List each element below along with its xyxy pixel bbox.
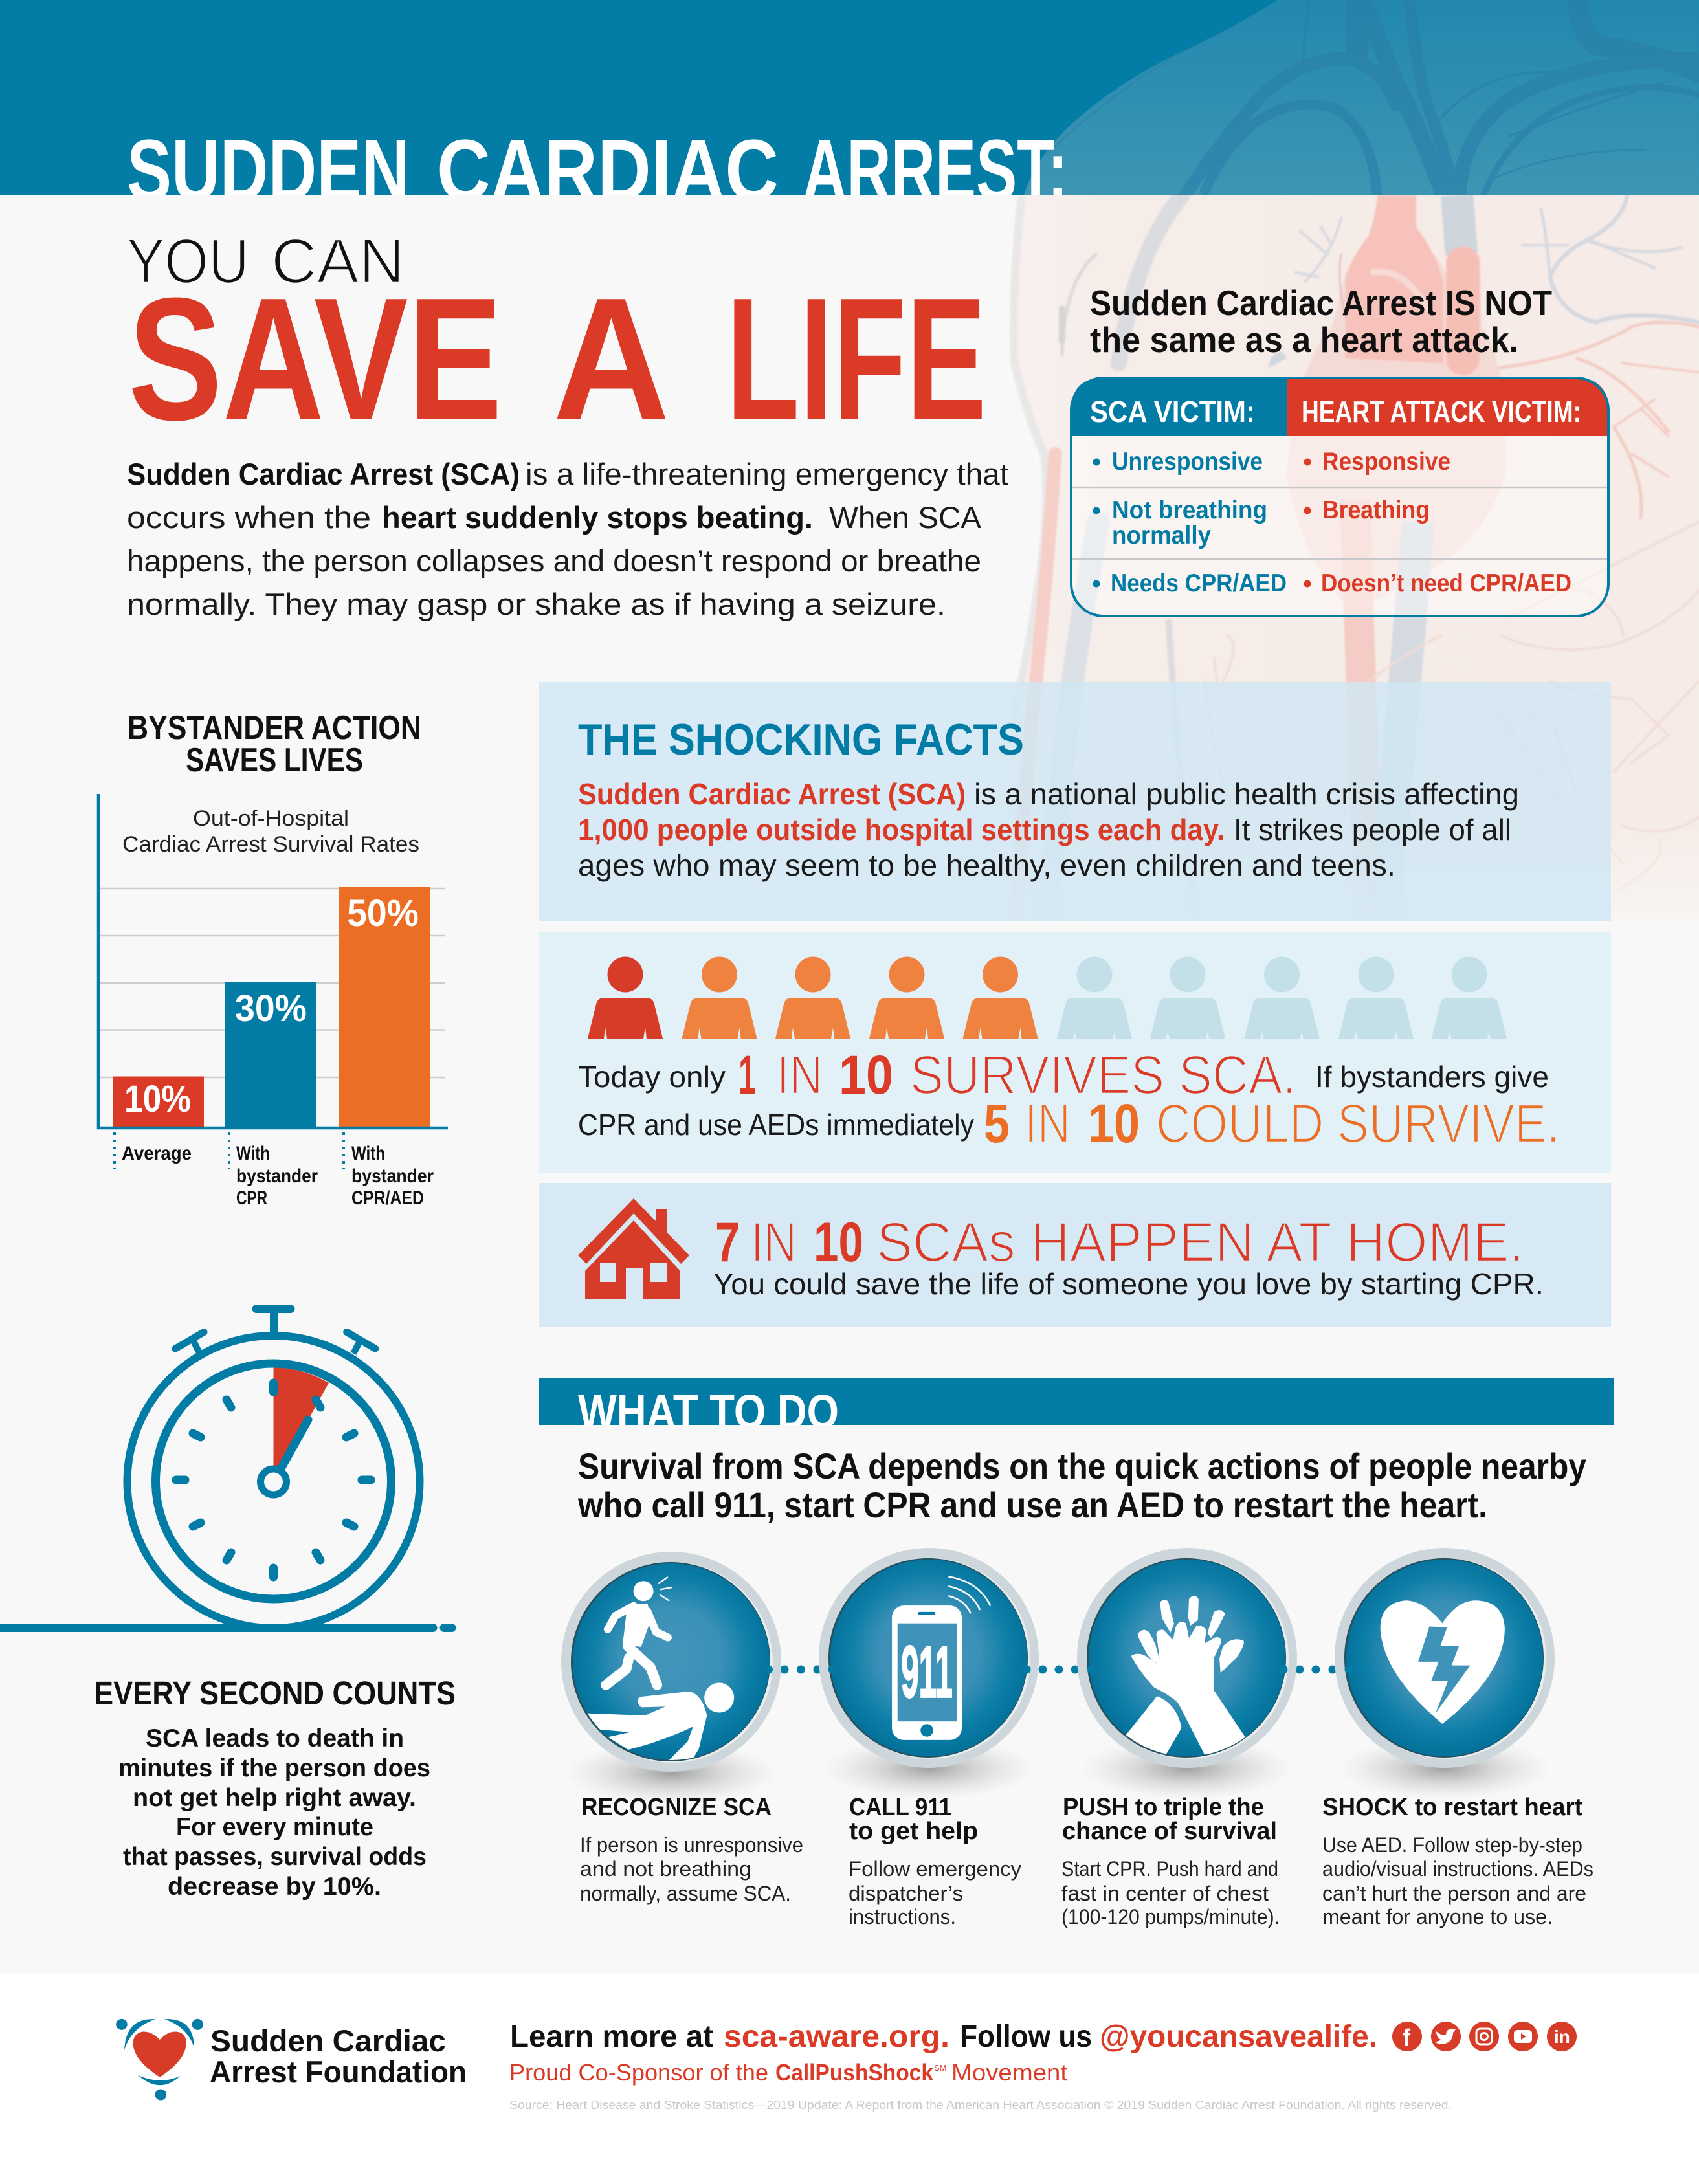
step: call 911: instructions. — [849, 1905, 956, 1928]
icon: twitter — [1431, 2022, 1461, 2051]
heading: You can: YOU — [127, 226, 249, 296]
heading: the shocking facts: THE SHOCKING FACTS — [578, 715, 1024, 764]
step: call 911: to get help — [849, 1818, 978, 1845]
statistic: 7 in 10 happen at home: 7 — [715, 1211, 740, 1274]
statistic: 5 in 10 could survive: CPR and use AEDs immediately — [578, 1108, 974, 1142]
footer: learn more line — [510, 2020, 1377, 2054]
bar: with bystander CPR 30% — [225, 982, 316, 1127]
text: save someone you love: You could save the life of someone you love by starting CPR. — [713, 1267, 1544, 1301]
intro paragraph: When SCA — [829, 500, 982, 535]
step: recognize SCA: RECOGNIZE SCA — [581, 1794, 772, 1821]
comparison table — [1071, 378, 1608, 616]
statistic: 1 in 10 survives SCA: 10 — [839, 1044, 893, 1105]
footer: learn more line: sca-aware.org. — [724, 2020, 949, 2054]
footer: co-sponsor line: CallPushShock — [775, 2059, 934, 2086]
text: every second counts body: decrease by 10%. — [168, 1873, 381, 1901]
step: push: chance of survival — [1062, 1818, 1277, 1845]
title: Sudden Cardiac Arrest: SUDDEN — [127, 122, 410, 219]
icon: push CPR hands badge — [1077, 1548, 1297, 1800]
persons: not surviving in pale blue — [1057, 956, 1507, 1039]
step: call 911: CALL 911 — [849, 1794, 951, 1821]
heading: Save a life: A — [553, 262, 670, 457]
chart subtitle: Cardiac Arrest Survival Rates — [122, 832, 419, 857]
statistic: 5 in 10 could survive: 10 — [1088, 1093, 1140, 1154]
footer: co-sponsor line: Movement — [951, 2059, 1067, 2086]
footer: co-sponsor line: SM — [934, 2063, 946, 2073]
statistic: 7 in 10 happen at home: SCAs HAPPEN AT HOME. — [876, 1211, 1524, 1274]
statistic: 1 in 10 survives SCA: SURVIVES SCA. — [910, 1044, 1296, 1105]
persons: could survive in orange — [682, 956, 1038, 1039]
what to do intro text: who call 911, start CPR and use an AED to restart the heart. — [577, 1484, 1487, 1525]
heading: Save a life: SAVE — [128, 262, 502, 457]
table header: SCA victim — [1071, 378, 1287, 436]
step: push — [1061, 1794, 1280, 1928]
column: heart attack victim signs: Doesn’t need CPR/AED — [1321, 569, 1571, 597]
icon: stopwatch — [0, 1308, 452, 1628]
column: heart attack victim signs: Responsive — [1322, 448, 1450, 476]
step: push: (100-120 pumps/minute). — [1061, 1905, 1280, 1928]
facts body text: It strikes people of all — [1234, 813, 1511, 846]
step: recognize SCA: If person is unresponsive — [580, 1833, 803, 1857]
column: SCA victim signs: Not breathing — [1112, 496, 1267, 524]
intro paragraph: is a life-threatening emergency that — [526, 457, 1008, 491]
logo mark — [116, 2019, 203, 2100]
bar: with bystander CPR/AED 50%: 50% — [347, 892, 419, 934]
step: call 911: dispatcher’s — [849, 1882, 963, 1905]
axis labels: CPR/AED — [351, 1187, 424, 1209]
person: survivor in red — [588, 956, 663, 1039]
text: every second counts body: SCA leads to death in — [146, 1725, 404, 1752]
column: SCA victim signs — [1093, 448, 1287, 597]
statistic: 1 in 10 survives SCA: 1 — [738, 1044, 756, 1105]
bar: average 10%: 10% — [124, 1078, 191, 1120]
icon: instagram — [1469, 2022, 1499, 2051]
step: shock: can’t hurt the person and are — [1322, 1882, 1586, 1905]
statistic: 1 in 10 survives SCA: If bystanders give — [1315, 1060, 1549, 1094]
table header: heart attack victim: HEART ATTACK VICTIM: — [1302, 395, 1581, 428]
anatomy illustration: tinted background on header — [1021, 0, 1699, 204]
facts body text: 1,000 people outside hospital settings each day. — [578, 813, 1225, 846]
table header: heart attack victim — [1287, 378, 1608, 436]
what to do banner — [539, 1378, 1614, 1425]
step: shock: audio/visual instructions. AEDs — [1322, 1857, 1594, 1881]
heading: You can: CAN — [271, 226, 405, 296]
axis labels: With — [236, 1143, 270, 1164]
statistic: 5 in 10 could survive — [578, 1093, 1560, 1154]
chart heading — [128, 709, 421, 779]
chart subtitle — [122, 806, 419, 857]
statistic: 1 in 10 survives SCA: IN — [777, 1044, 823, 1105]
statistic: 5 in 10 could survive: COULD SURVIVE. — [1156, 1093, 1560, 1154]
facts body text: ages who may seem to be healthy, even children and teens. — [578, 848, 1395, 882]
icon: youtube — [1508, 2022, 1538, 2051]
icon: recognize SCA badge — [561, 1552, 781, 1804]
step: shock — [1322, 1794, 1594, 1928]
icon: call 911 badge — [819, 1548, 1039, 1800]
footer band — [0, 1973, 1699, 2184]
intro paragraph: normally. They may gasp or shake as if having a seizure. — [127, 587, 946, 621]
footer: co-sponsor line: Proud Co-Sponsor of the — [509, 2059, 768, 2086]
statistic: 7 in 10 happen at home: 10 — [814, 1211, 863, 1274]
logo wordmark: Arrest Foundation — [210, 2055, 467, 2089]
what to do intro text — [577, 1446, 1586, 1525]
statistic: 7 in 10 happen at home: IN — [751, 1211, 797, 1274]
text: every second counts body — [118, 1725, 430, 1901]
text: every second counts body: that passes, survival odds — [123, 1843, 427, 1871]
callout: SCA is not a heart attack: the same as a heart attack. — [1090, 320, 1518, 360]
heading: Save a life — [128, 262, 986, 457]
bar: with bystander CPR/AED 50% — [339, 887, 430, 1127]
step: push: PUSH to triple the — [1063, 1794, 1264, 1821]
axis labels: CPR — [236, 1187, 267, 1209]
step: shock: Use AED. Follow step-by-step — [1322, 1833, 1582, 1857]
facts body text: is a national public health crisis affecting — [974, 777, 1519, 811]
step: recognize SCA — [580, 1794, 803, 1905]
panel: the shocking facts — [539, 682, 1611, 921]
table header: SCA victim: SCA VICTIM: — [1090, 395, 1255, 428]
anatomy illustration: heart and blood vessels on page — [1010, 195, 1699, 895]
heading: every second counts: EVERY SECOND COUNTS — [94, 1675, 456, 1712]
step: shock: meant for anyone to use. — [1322, 1905, 1553, 1928]
icon: call 911 badge: 911 — [901, 1631, 953, 1713]
step: call 911: Follow emergency — [849, 1857, 1021, 1881]
axis labels: Average — [122, 1143, 192, 1164]
bar: average 10% — [113, 1077, 204, 1127]
callout: SCA is not a heart attack: Sudden Cardiac Arrest IS NOT — [1090, 283, 1552, 323]
title: Sudden Cardiac Arrest: CARDIAC — [437, 122, 779, 219]
what to do intro text: Survival from SCA depends on the quick actions of people nearby — [578, 1446, 1586, 1486]
intro paragraph — [127, 457, 1008, 621]
logo wordmark: Sudden Cardiac — [210, 2024, 446, 2058]
footer: learn more line: Learn more at — [510, 2020, 713, 2054]
statistic: 5 in 10 could survive: 5 — [984, 1093, 1010, 1154]
statistic: 5 in 10 could survive: IN — [1025, 1093, 1071, 1154]
statistic: 1 in 10 survives SCA: Today only — [578, 1060, 726, 1094]
what to do banner: WHAT TO DO — [578, 1385, 839, 1439]
facts body text: Sudden Cardiac Arrest (SCA) — [578, 777, 966, 811]
intro paragraph: happens, the person collapses and doesn’t respond or breathe — [127, 544, 981, 578]
column: SCA victim signs: Needs CPR/AED — [1111, 569, 1287, 597]
axis labels: bystander — [351, 1165, 434, 1187]
heading: Save a life: LIFE — [726, 262, 986, 457]
bar: with bystander CPR 30%: 30% — [235, 987, 307, 1030]
callout: SCA is not a heart attack — [1090, 283, 1552, 360]
heading: You can — [127, 226, 405, 296]
title: Sudden Cardiac Arrest: ARREST: — [803, 122, 1068, 219]
intro paragraph: heart suddenly stops beating. — [382, 500, 813, 535]
chart heading: BYSTANDER ACTION — [128, 709, 421, 747]
column: SCA victim signs: Unresponsive — [1112, 448, 1263, 476]
logo: Sudden Cardiac Arrest Foundation — [116, 2019, 467, 2100]
bar chart: survival rates — [98, 794, 448, 1209]
intro paragraph: Sudden Cardiac Arrest (SCA) — [127, 457, 520, 491]
title: Sudden Cardiac Arrest — [129, 139, 1062, 195]
logo wordmark — [210, 2024, 467, 2089]
panel: 1 in 10 survives — [539, 932, 1611, 1173]
icon: linkedin: in — [1554, 2027, 1570, 2047]
chart subtitle: Out-of-Hospital — [193, 806, 349, 831]
chart heading: SAVES LIVES — [186, 742, 363, 779]
icon: facebook — [1392, 2022, 1422, 2051]
people pictogram — [588, 956, 1507, 1039]
step: push: Start CPR. Push hard and — [1061, 1857, 1278, 1881]
footer: co-sponsor line — [509, 2059, 1067, 2086]
step: recognize SCA: and not breathing — [580, 1857, 751, 1881]
axis labels: bystander — [236, 1165, 318, 1187]
column: heart attack victim signs — [1304, 448, 1571, 597]
footer: source note: Source: Heart Disease and Stroke Statistics—2019 Update: A Report from the American Heart Association © 2019 Sudden Cardiac Arrest Foundation. All rights reserved. — [509, 2099, 1452, 2112]
statistic: 1 in 10 survives SCA — [578, 1044, 1549, 1105]
panel: 7 in 10 at home — [539, 1183, 1611, 1327]
column: heart attack victim signs: Breathing — [1322, 496, 1430, 524]
icon: linkedin — [1547, 2022, 1577, 2051]
icon: house — [578, 1198, 689, 1299]
text: every second counts body: minutes if the person does — [118, 1754, 430, 1782]
intro paragraph: occurs when the — [127, 500, 371, 535]
icon: facebook: f — [1403, 2024, 1411, 2051]
step: recognize SCA: normally, assume SCA. — [580, 1882, 791, 1905]
step: shock: SHOCK to restart heart — [1322, 1794, 1582, 1821]
facts body text — [578, 777, 1519, 882]
step: call 911 — [849, 1794, 1021, 1928]
axis labels — [122, 1143, 434, 1209]
column: SCA victim signs: normally — [1112, 522, 1211, 549]
footer: learn more line: @youcansavealife. — [1100, 2020, 1377, 2054]
footer: learn more line: Follow us — [960, 2020, 1092, 2054]
text: every second counts body: not get help right away. — [133, 1784, 416, 1812]
step: push: fast in center of chest — [1061, 1882, 1269, 1905]
step connector dots — [781, 1666, 1337, 1673]
social media icons — [1392, 2022, 1577, 2051]
header band — [0, 0, 1699, 195]
axis labels: With — [351, 1143, 385, 1164]
icon: shock heart badge — [1335, 1548, 1555, 1800]
text: every second counts body: For every minute — [176, 1813, 373, 1841]
